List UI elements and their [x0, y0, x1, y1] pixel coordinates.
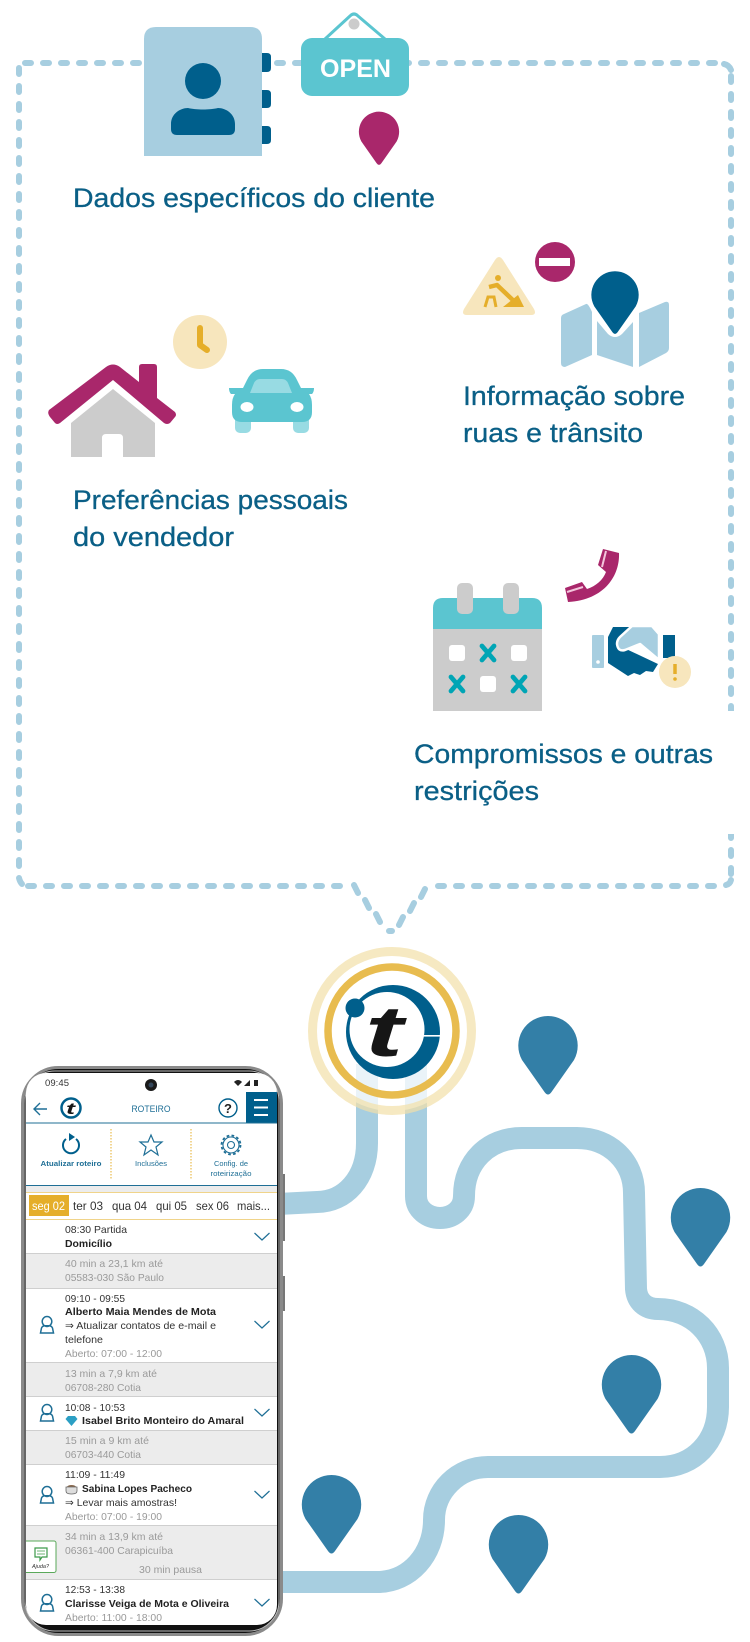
- help button: Ajuda?: [31, 1564, 50, 1570]
- chevrons: [254, 1233, 270, 1606]
- route stop list text: 30 min pausa: [139, 1564, 202, 1576]
- icon: cup badge: [66, 1485, 77, 1494]
- icon: car: [229, 369, 314, 433]
- route stop list text: Aberto: 07:00 - 12:00: [65, 1348, 162, 1360]
- dashed callout frame: [19, 63, 750, 931]
- heading: appointments and other restrictions: restrições: [414, 776, 539, 806]
- smartphone: [22, 1068, 285, 1634]
- day tabs: [26, 1192, 277, 1220]
- day tabs: qui 05: [156, 1199, 187, 1213]
- route stop list text: Aberto: 07:00 - 19:00: [65, 1511, 162, 1523]
- toolbar: Inclusões: [135, 1159, 167, 1168]
- heading: seller personal preferences: Preferências pessoais: [73, 485, 348, 515]
- icon: calendar: [433, 583, 542, 711]
- route stop list text: ⇒ Levar mais amostras!: [65, 1497, 177, 1509]
- heading: appointments and other restrictions: [414, 739, 713, 806]
- heading: appointments and other restrictions: Compromissos e outras: [414, 739, 713, 769]
- icon: magenta location pin: [359, 112, 399, 165]
- route stop list text: 06361-400 Carapicuíba: [65, 1545, 173, 1557]
- phone screen: [24, 1073, 277, 1625]
- route stop list text: ⇒ Atualizar contatos de e-mail e: [65, 1320, 216, 1332]
- day tabs: qua 04: [112, 1199, 147, 1213]
- route stop list text: 13 min a 7,9 km até: [65, 1368, 157, 1380]
- status bar: 09:45: [45, 1078, 69, 1089]
- route stop list text: telefone: [65, 1334, 103, 1346]
- route stop list text: 11:09 - 11:49: [65, 1469, 125, 1481]
- heading: street and traffic information: Informação sobre: [463, 381, 685, 411]
- route line: [278, 1064, 718, 1582]
- app header: ?: [224, 1101, 232, 1116]
- route stop list text: [65, 1224, 244, 1624]
- day tabs: seg 02: [32, 1199, 65, 1213]
- route stop list text: 09:10 - 09:55: [65, 1293, 125, 1305]
- route stop list text: Alberto Maia Mendes de Mota: [65, 1306, 216, 1318]
- heading: seller personal preferences: [73, 485, 348, 552]
- logo badge: t: [365, 993, 408, 1072]
- day tabs: ter 03: [73, 1199, 103, 1213]
- toolbar: [26, 1129, 277, 1192]
- toolbar: Atualizar roteiro: [40, 1159, 102, 1168]
- route stop list text: 05583-030 São Paulo: [65, 1272, 164, 1284]
- heading: seller personal preferences: do vendedor: [73, 522, 234, 552]
- toolbar: Config. de: [214, 1159, 248, 1168]
- app header: ROTEIRO: [132, 1104, 170, 1115]
- day tabs: sex 06: [196, 1199, 229, 1213]
- route stop list text: 15 min a 9 km até: [65, 1435, 149, 1447]
- grey leg rows: [26, 1253, 277, 1580]
- icon: telephone handset: [565, 549, 619, 602]
- route stop list text: Isabel Brito Monteiro do Amaral: [82, 1415, 244, 1427]
- route stop list text: 08:30 Partida: [65, 1224, 127, 1236]
- route stop list text: 06708-280 Cotia: [65, 1382, 141, 1394]
- logo badge: [312, 951, 472, 1111]
- route stop list text: 12:53 - 13:38: [65, 1584, 125, 1596]
- route stop list text: 34 min a 13,9 km até: [65, 1531, 163, 1543]
- icon: diamond badge: [66, 1416, 78, 1426]
- route stop list text: Domicílio: [65, 1238, 112, 1250]
- heading: customer data: Dados específicos do cliente: [73, 183, 435, 213]
- day tabs: mais...: [237, 1199, 270, 1213]
- icon: open sign: [301, 14, 409, 96]
- toolbar: roteirização: [210, 1169, 252, 1178]
- icon: road works sign: [463, 257, 535, 315]
- route stop list text: Sabina Lopes Pacheco: [82, 1483, 192, 1495]
- icon: open sign: OPEN: [320, 55, 391, 83]
- map pins: [302, 1016, 730, 1594]
- route stop list text: Aberto: 11:00 - 18:00: [65, 1612, 162, 1624]
- route stop list text: 06703-440 Cotia: [65, 1449, 141, 1461]
- icon: no entry sign: [535, 242, 575, 282]
- icon: handshake with alert: [592, 626, 691, 688]
- app header: t: [66, 1101, 76, 1118]
- heading: street and traffic information: ruas e trânsito: [463, 418, 643, 448]
- icon: clock: [173, 315, 227, 369]
- app header: [26, 1092, 277, 1124]
- heading: street and traffic information: [463, 381, 685, 448]
- icon: house: [48, 364, 176, 457]
- route stop list text: Clarisse Veiga de Mota e Oliveira: [65, 1598, 229, 1610]
- route stop list text: 40 min a 23,1 km até: [65, 1258, 163, 1270]
- status bar: [45, 1078, 258, 1091]
- route stop list text: 10:08 - 10:53: [65, 1402, 125, 1414]
- icon: map with pin: [561, 271, 669, 367]
- user icons: [40, 1316, 54, 1611]
- icon: contact book: [144, 27, 271, 156]
- help button: [24, 1541, 56, 1572]
- row dividers: [26, 1253, 277, 1580]
